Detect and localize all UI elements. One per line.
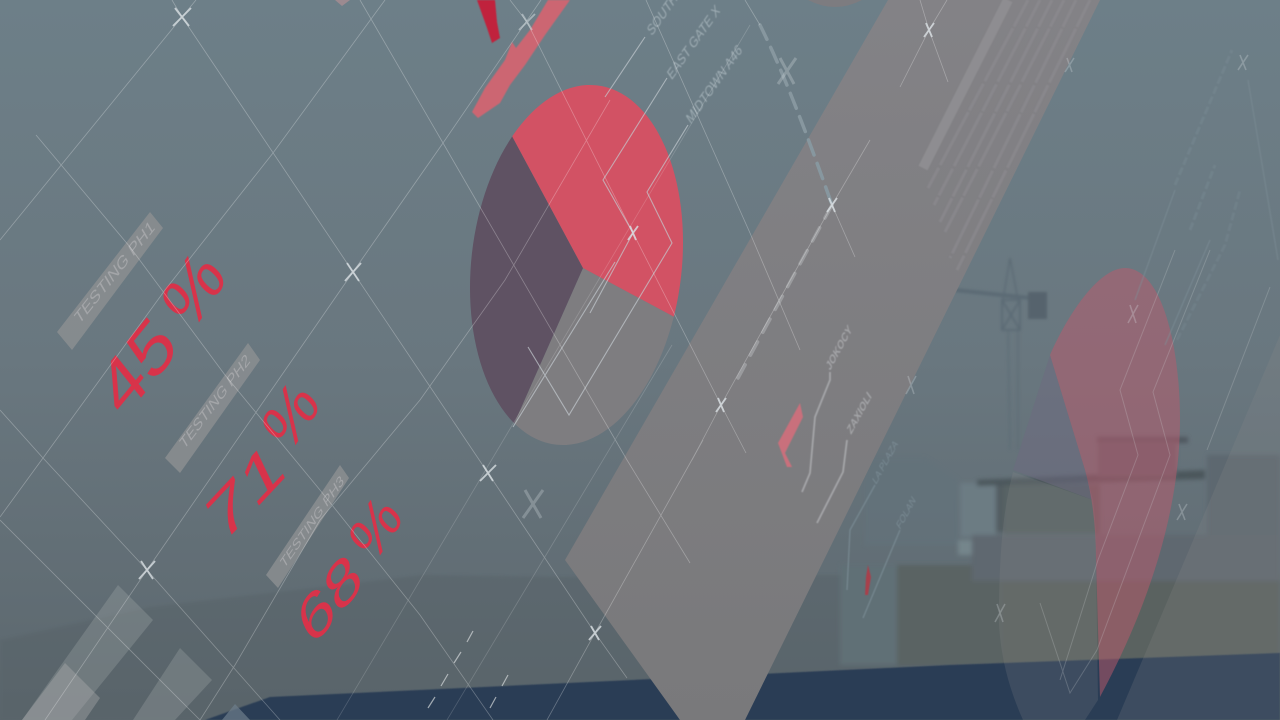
map: dashed route (738, 25, 832, 378)
pie slice: red (512, 85, 683, 317)
label tag: testing ph1: TESTING PH1 (72, 216, 157, 328)
map: pink landmass (778, 403, 803, 467)
icon: small arrow bottom left of navy surface (222, 704, 250, 720)
percentage: 45 (84, 235, 239, 432)
background: navy foreground surface (205, 653, 1280, 720)
map: pink fragment top left (335, 0, 350, 6)
bar: bottom left one (22, 585, 153, 720)
pie slice: dark plum (470, 136, 583, 424)
road labels top (644, 0, 745, 126)
zigzag lines over right pie (1040, 250, 1270, 693)
map: small red marker (865, 565, 871, 595)
road labels top: MIDTOWN A46 (683, 42, 745, 126)
large grey diagonal panel (565, 0, 1100, 720)
pie slice: grey translucent (999, 472, 1098, 720)
callout lines from road labels (513, 37, 688, 427)
map: road two with label: ZAXIOLI (846, 390, 874, 437)
pie chart: main (470, 85, 683, 445)
map: faint road labels beyond panel: FOLAN (895, 494, 918, 532)
label tag: testing ph3 (266, 465, 349, 588)
percentage: 71: 71 (198, 426, 294, 558)
map: faint upper right routes (1135, 50, 1278, 345)
pie chart: large right translucent (999, 268, 1180, 720)
road labels top: EAST GATE X (664, 1, 724, 82)
percentage: 71: % (249, 365, 331, 465)
percentage: 68: 68 (288, 539, 371, 659)
map: grey fragment top (808, 0, 862, 7)
lattice lines (0, 0, 948, 720)
panel: map inside grey panel (738, 25, 874, 523)
label tag: testing ph2 (165, 343, 260, 473)
pie slice: dark translucent (1013, 355, 1093, 500)
background: foggy city skyline (840, 437, 1280, 666)
map: red coastline top, dark (477, 0, 500, 43)
map: faint road labels beyond panel: LA PLAZA (871, 438, 900, 487)
map: road two with label (817, 390, 874, 523)
cross markers at lattice nodes (139, 8, 934, 640)
map: faint road labels beyond panel (847, 438, 918, 618)
map: red coastline top, salmon (472, 0, 570, 118)
percentage: 68: % (338, 482, 413, 574)
map: road one with label (802, 322, 854, 492)
panel: text stripes at the top of the grey panel (923, 0, 1090, 270)
percentage: 45: % (149, 235, 239, 345)
faint cross markers (523, 55, 1248, 622)
percentage: 45: 45 (84, 301, 191, 432)
label tag: testing ph1 (57, 212, 163, 350)
percentage: 68 (288, 482, 413, 659)
percentage: 71 (198, 365, 331, 558)
pie slice: red translucent (1050, 268, 1180, 697)
label tag: testing ph2: TESTING PH2 (178, 351, 253, 453)
map: road one with label: JOKOCY (825, 322, 854, 373)
background: foggy hillside (0, 575, 1280, 720)
background: construction crane (955, 258, 1047, 450)
white tick marks bottom center (428, 631, 508, 708)
pie slice: grey (514, 268, 674, 445)
bar: bottom left two (133, 648, 212, 720)
label tag: testing ph3: TESTING PH3 (279, 473, 346, 572)
translucent band: lower right (1117, 335, 1280, 720)
